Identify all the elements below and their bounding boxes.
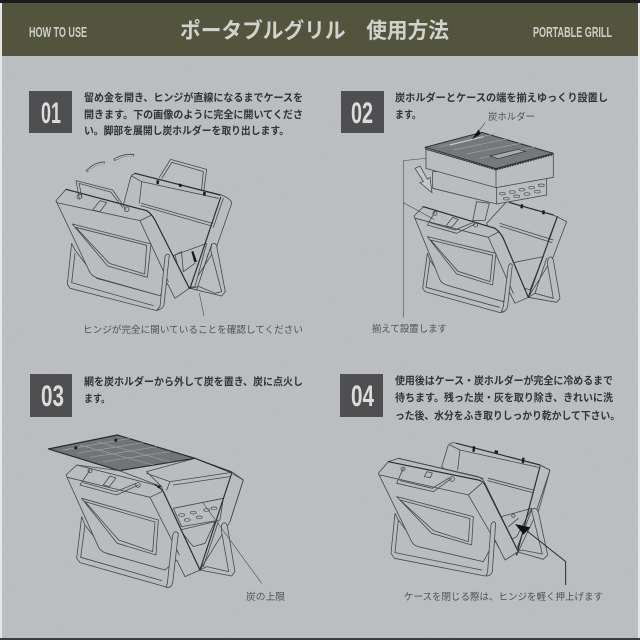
cooking grate: [48, 435, 195, 489]
title: ポータブルグリル 使用方法: [180, 18, 449, 43]
step 01 panel: [29, 91, 303, 336]
illustration: grate lifted, charcoal placed: [48, 435, 262, 588]
leader: charcoal limit: [203, 503, 262, 583]
leader arrow: holder: [472, 123, 485, 139]
step number 04: 04: [351, 380, 374, 413]
step number 02: 02: [351, 97, 373, 130]
label: charcoal holder: 炭ホルダー: [488, 111, 535, 123]
caption: charcoal upper limit: 炭の上限: [246, 591, 285, 603]
step 04 instructions: 使用後はケース・炭ホルダーが完全に冷めるまで: [395, 374, 613, 387]
illustration: charcoal holder lowered into case: [403, 123, 567, 317]
charcoal holder: [425, 132, 553, 204]
step 01 instructions: 留め金を開き、ヒンジが直線になるまでケースを: [84, 91, 303, 104]
leader: align edges: [403, 158, 434, 317]
arrows: open motion: [87, 155, 134, 172]
caption: confirm hinge open: ヒンジが完全に開いていることを確認してください: [83, 324, 303, 336]
illustration: grill being closed: [378, 443, 566, 585]
step number 04: [340, 374, 383, 417]
header band: [0, 0, 640, 56]
step 04 instructions: った後、水分をふき取りしっかり乾かして下さい。: [395, 409, 620, 422]
step 03 instructions: ます。: [84, 393, 110, 405]
step 03 instructions: 網を炭ホルダーから外して炭を置き、炭に点火し: [84, 375, 303, 388]
step number 03: [30, 374, 72, 417]
arrow: downward outline: [415, 166, 432, 193]
step 02 panel: [341, 91, 608, 335]
step 02 instructions: ます。: [395, 109, 421, 121]
illustration: grill opened flat: [56, 155, 232, 316]
step 04 panel: [340, 374, 620, 603]
step number 01: [29, 91, 72, 133]
step 03 panel: [30, 374, 303, 603]
step number 02: [341, 91, 384, 133]
step 01 instructions: い。脚部を展開し炭ホルダーを取り出します。: [84, 124, 289, 137]
step number 03: 03: [41, 380, 64, 413]
caption: align and install: 揃えて設置します: [372, 323, 447, 335]
leader arrow: hinge: [515, 524, 566, 585]
step 02 instructions: 炭ホルダーとケースの端を揃えゆっくり設置し: [395, 91, 608, 104]
step 01 instructions: 開きます。下の画像のように完全に開いてくださ: [84, 108, 303, 121]
caption: push hinge when closing: ケースを閉じる際は、ヒンジを軽く押上げます: [404, 591, 603, 603]
step 04 instructions: 待ちます。残った炭・灰を取り除き、きれいに洗: [395, 391, 613, 404]
header label: how to use: HOW TO USE: [29, 24, 87, 41]
step number 01: 01: [41, 97, 61, 130]
